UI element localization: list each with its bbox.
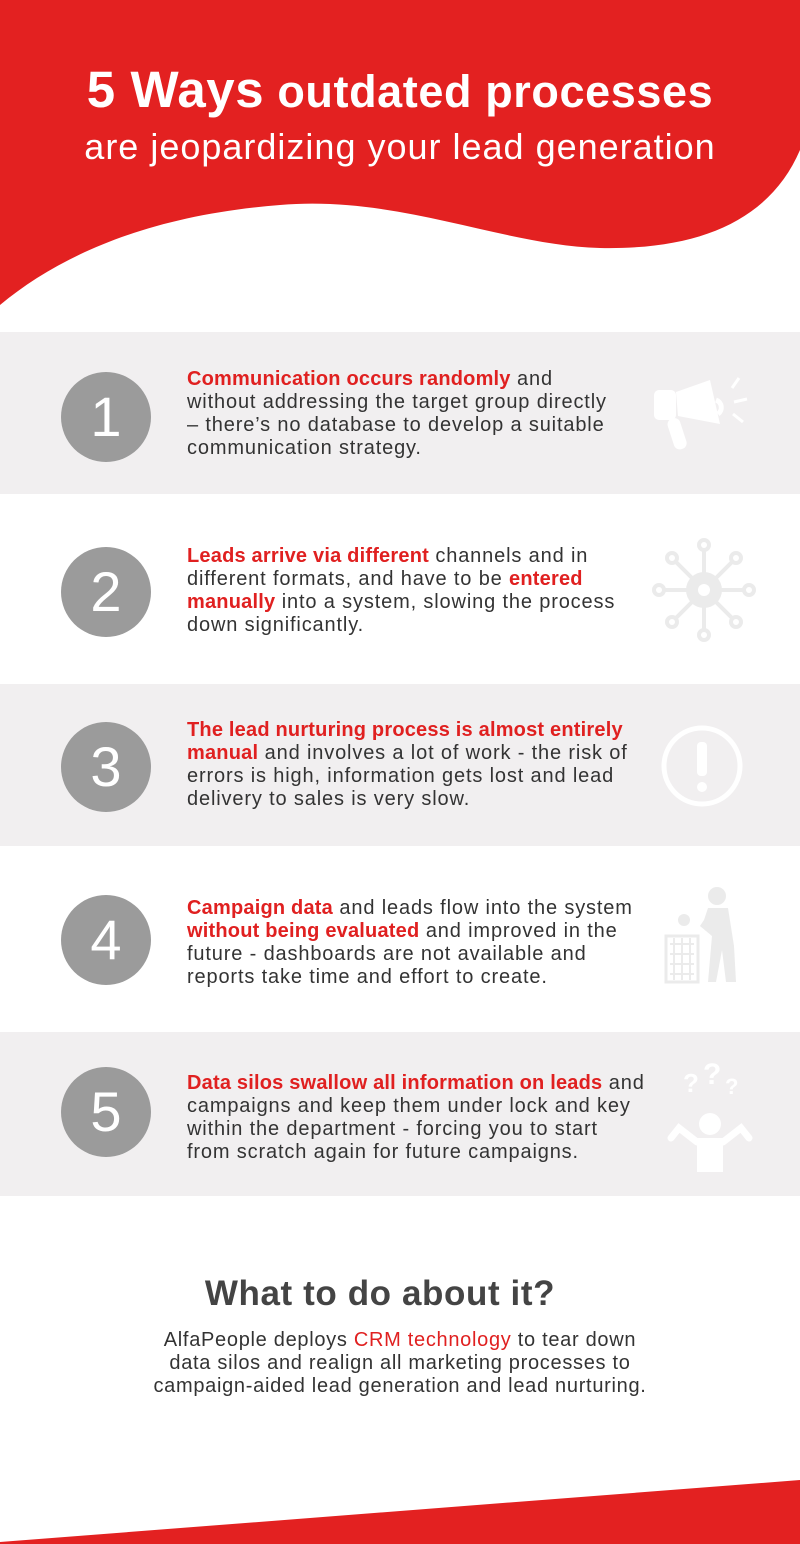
icon: confused person: ? [725,1074,738,1099]
title: 5 Ways outdated processes [87,61,713,118]
text 5: from scratch again for future campaigns. [187,1141,579,1163]
text 4: future - dashboards are not available and [187,943,587,965]
text 1: Communication occurs randomly and [187,368,553,390]
text 4 [187,897,633,988]
text 5: Data silos swallow all information on leads and [187,1072,645,1094]
text 1: communication strategy. [187,437,422,459]
text 3: The lead nurturing process is almost entirely [187,719,623,741]
number 3: 3 [90,735,122,798]
text 1 [187,368,607,459]
icon: exclamation [662,726,742,806]
number 5: 5 [90,1080,122,1143]
number 1: 1 [90,385,122,448]
text 2 [187,545,615,636]
number 2 [61,547,151,637]
text 2: down significantly. [187,614,364,636]
text 2: Leads arrive via different channels and in [187,545,588,567]
text 3: errors is high, information gets lost and lead [187,765,614,787]
footer red wedge [0,1480,800,1544]
text 1: – there’s no database to develop a suitable [187,414,605,436]
text 2: manually into a system, slowing the process [187,591,615,613]
icon: megaphone [654,378,748,450]
panel 1 [0,332,800,494]
heading: what to do: What to do about it? [205,1274,555,1313]
panel 5 [0,1032,800,1196]
title [84,61,716,167]
icon: confused person: ? [683,1068,699,1098]
text 4: Campaign data and leads flow into the system [187,897,633,919]
number 5 [61,1067,151,1157]
title: are jeopardizing your lead generation [84,126,716,167]
text 3 [187,719,628,810]
text 2: different formats, and have to be entered [187,568,583,590]
text 5 [187,1072,645,1163]
text 5: campaigns and keep them under lock and key [187,1095,631,1117]
panel 2 [61,538,756,642]
icon: trash person [664,887,736,984]
text 4: without being evaluated and improved in the [187,920,618,942]
icon: confused person [668,1062,752,1172]
icon: network [652,538,756,642]
text 5: within the department - forcing you to start [187,1118,598,1140]
text 3: manual and involves a lot of work - the risk of [187,742,628,764]
number 3 [61,722,151,812]
panel 3 [0,684,800,846]
text 3: delivery to sales is very slow. [187,788,470,810]
conclusion text [153,1329,647,1397]
panel 4 [61,887,736,988]
text 4: reports take time and effort to create. [187,966,548,988]
conclusion text: data silos and realign all marketing processes to [169,1352,631,1374]
number 1 [61,372,151,462]
text 1: without addressing the target group directly [187,391,607,413]
number 4 [61,895,151,985]
conclusion text: campaign-aided lead generation and lead nurturing. [153,1375,647,1397]
number 2: 2 [90,560,122,623]
conclusion text: AlfaPeople deploys CRM technology to tear down [164,1329,636,1351]
number 4: 4 [90,908,122,971]
header red wave [0,0,800,305]
